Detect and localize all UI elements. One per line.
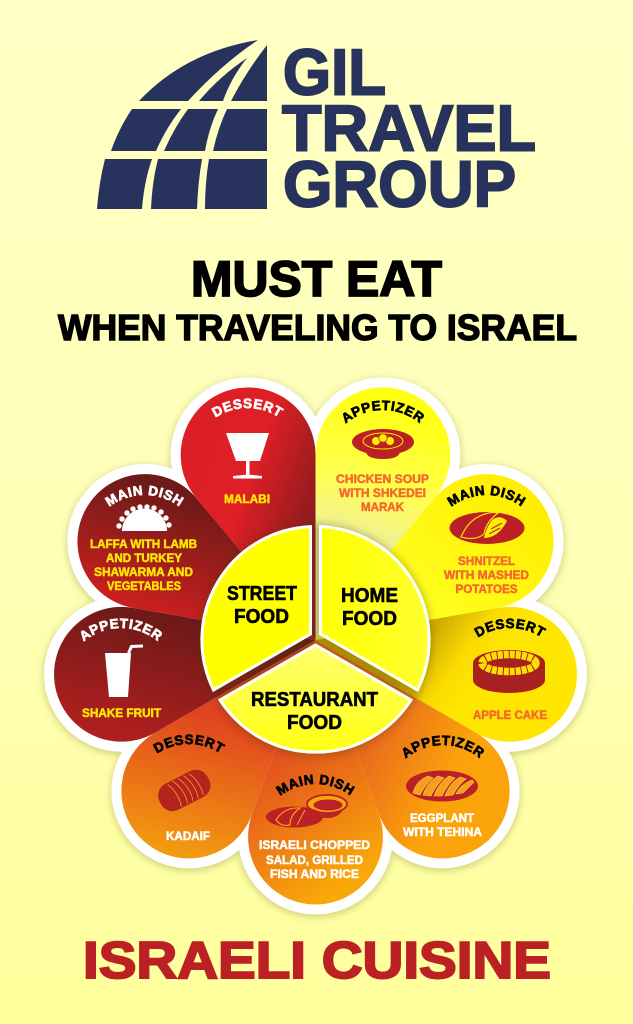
food name: MARAK xyxy=(361,500,404,514)
label: appetizer: APPETIZER xyxy=(402,735,484,759)
label: appetizer: APPETIZER xyxy=(80,618,162,642)
heading: when traveling to Israel: WHEN TRAVELING TO ISRAEL xyxy=(58,307,577,348)
label: appetizer: APPETIZER xyxy=(342,400,424,424)
label: dessert: DESSERT xyxy=(474,618,546,638)
sector label: FOOD xyxy=(287,712,342,734)
food name: CHICKEN SOUP xyxy=(336,472,429,486)
sector label xyxy=(227,583,297,628)
logo wordmark: GROUP xyxy=(283,148,516,220)
food name: SALAD, GRILLED xyxy=(266,853,363,867)
label: dessert: DESSERT xyxy=(211,398,284,418)
food name: ISRAELI CHOPPED xyxy=(259,838,370,852)
icon: shnitzel plate xyxy=(450,512,524,544)
food name: WITH TEHINA xyxy=(403,825,482,839)
sector: restaurant food xyxy=(220,645,411,752)
food name: WITH MASHED xyxy=(444,568,529,582)
petal: restaurant food dessert xyxy=(121,640,316,858)
logo mark: globe grid xyxy=(97,40,267,209)
sector label xyxy=(251,689,378,734)
icon: kadaif roll xyxy=(154,765,215,816)
food name xyxy=(403,811,482,839)
food name xyxy=(444,554,529,596)
label: dessert: DESSERT xyxy=(152,734,226,754)
label: main dish: MAIN DISH xyxy=(276,774,356,796)
label: main dish: MAIN DISH xyxy=(104,485,184,507)
logo wordmark: TRAVEL xyxy=(282,92,536,164)
food name: LAFFA WITH LAMB xyxy=(90,537,197,551)
icon: fish plate and bowl xyxy=(266,795,347,828)
petal: restaurant food main dish xyxy=(248,640,383,904)
logo: Gil Travel Group xyxy=(97,36,536,220)
sector: home food xyxy=(320,527,429,690)
food name: SHNITZEL xyxy=(458,554,515,568)
sector label xyxy=(341,585,398,630)
food name: POTATOES xyxy=(456,582,518,596)
food name: FISH AND RICE xyxy=(270,867,359,881)
icon: eggplant plate xyxy=(406,770,478,802)
sector label: HOME xyxy=(341,585,398,607)
food name xyxy=(259,838,370,881)
icon: apple cake xyxy=(473,650,545,693)
petal: street food main dish xyxy=(77,474,316,640)
flower backing: white halo and shadow xyxy=(44,377,588,917)
icon: dumpling xyxy=(116,504,172,531)
petal: home food main dish xyxy=(316,474,554,640)
petal: home food dessert xyxy=(316,606,577,742)
food name: VEGETABLES xyxy=(107,579,181,593)
icon: soup bowl xyxy=(352,429,414,459)
petal: home food appetizer xyxy=(316,388,450,640)
label: main dish: MAIN DISH xyxy=(446,485,526,507)
petal: street food dessert xyxy=(180,388,316,640)
icon: dessert glass xyxy=(226,433,269,478)
icon: shake cup xyxy=(105,646,143,697)
logo wordmark xyxy=(282,36,536,220)
sector label: RESTAURANT xyxy=(251,689,378,711)
sector label: FOOD xyxy=(342,608,397,630)
food name: EGGPLANT xyxy=(410,811,475,825)
food name: MALABI xyxy=(224,492,270,506)
petal: restaurant food appetizer xyxy=(316,640,510,858)
food name xyxy=(90,537,197,593)
food name: APPLE CAKE xyxy=(473,708,547,722)
food name: KADAIF xyxy=(166,829,210,843)
food name: WITH SHKEDEI xyxy=(339,486,426,500)
heading: must eat: MUST EAT xyxy=(191,251,442,307)
food name: AND TURKEY xyxy=(106,551,182,565)
sector label: FOOD xyxy=(234,606,289,628)
sector label: STREET xyxy=(227,583,297,605)
sector: street food xyxy=(202,527,310,690)
petal: street food appetizer xyxy=(54,606,316,742)
food name: SHAWARMA AND xyxy=(94,565,193,579)
logo wordmark: GIL xyxy=(283,36,386,108)
food name xyxy=(336,472,429,514)
food name: SHAKE FRUIT xyxy=(82,706,162,720)
footer title: Israeli cuisine: ISRAELI CUISINE xyxy=(83,932,551,990)
center shadow xyxy=(198,523,432,757)
